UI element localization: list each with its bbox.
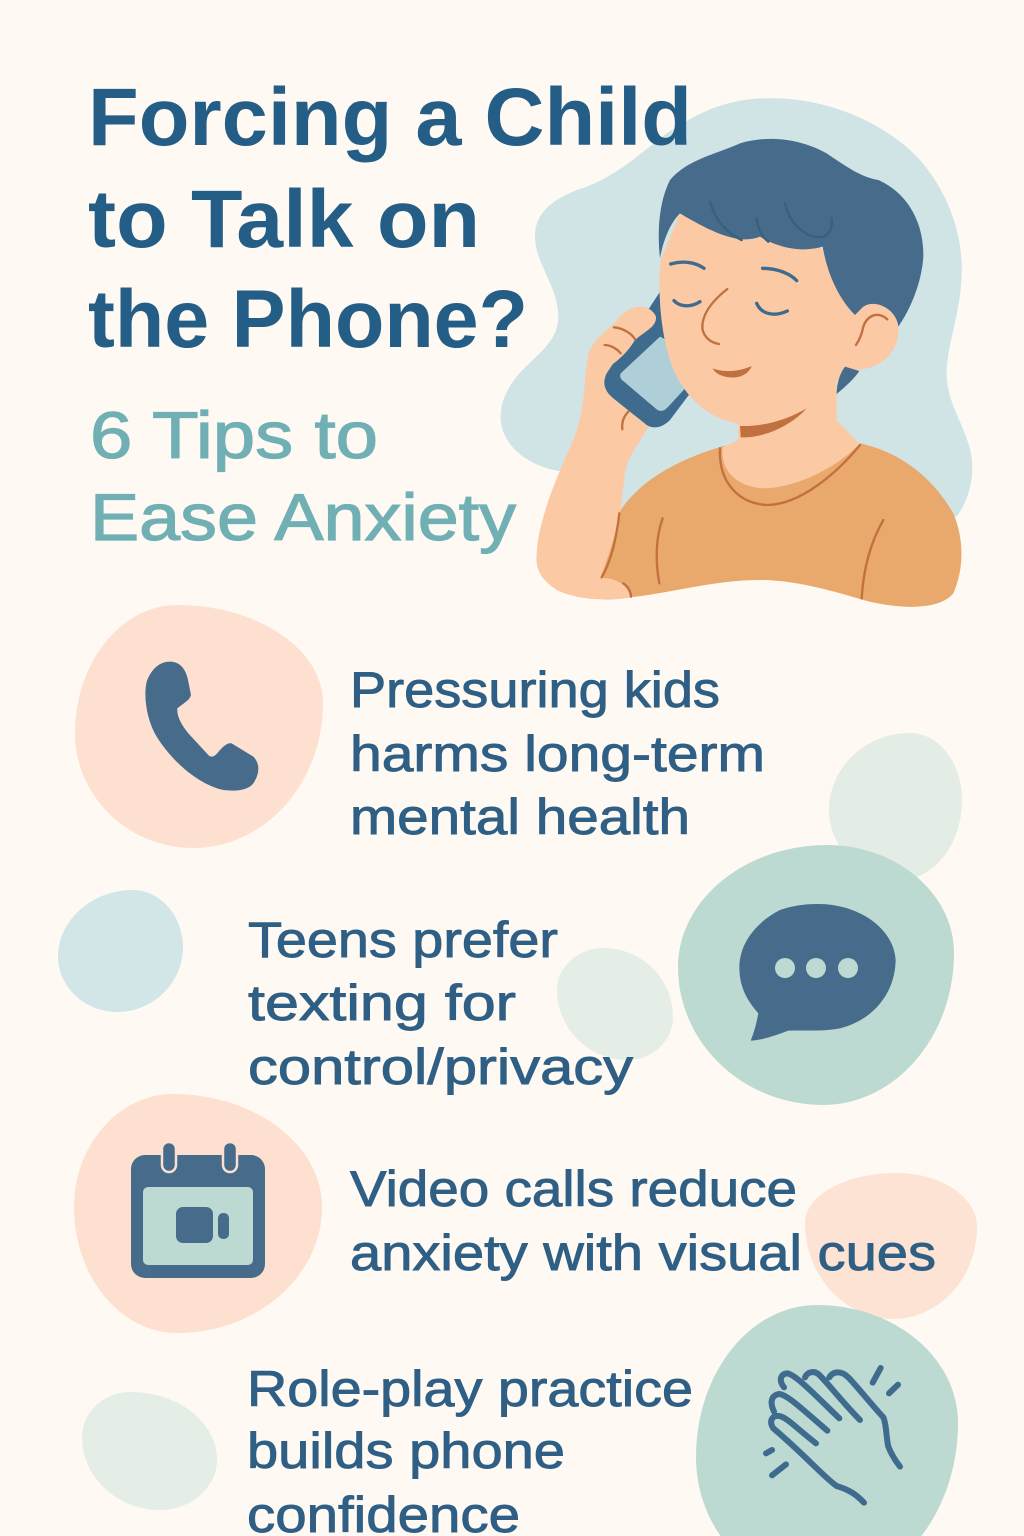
tip 1	[75, 605, 765, 848]
phone screen	[620, 337, 687, 411]
teal blob	[696, 1305, 958, 1536]
tip text	[350, 1161, 936, 1281]
subtitle	[90, 398, 516, 554]
fingers	[587, 307, 656, 365]
illustration: child on the phone	[501, 98, 972, 607]
tip text: texting for	[248, 975, 516, 1031]
decorative blob: center	[557, 948, 673, 1060]
chat dots	[775, 958, 858, 978]
title: Forcing a Child	[88, 72, 692, 163]
tip 3	[74, 1094, 936, 1333]
face	[660, 213, 860, 425]
tip 2	[248, 845, 954, 1105]
teal blob	[678, 845, 954, 1105]
peach blob	[74, 1094, 322, 1333]
subtitle: Ease Anxiety	[90, 480, 516, 554]
tip text: builds phone	[247, 1423, 565, 1479]
decorative blob: left light blue	[58, 890, 183, 1012]
decorative blob: upper right	[829, 733, 962, 880]
eyebrows and eyes	[671, 262, 797, 314]
tip text	[350, 662, 765, 845]
tip 4	[247, 1305, 958, 1536]
hair strands	[710, 202, 832, 242]
title	[88, 72, 692, 365]
phone	[604, 287, 690, 427]
title: to Talk on	[88, 174, 480, 265]
tip text: mental health	[350, 789, 690, 845]
tip text: Teens prefer	[248, 912, 558, 968]
tip text: anxiety with visual cues	[350, 1225, 936, 1281]
arm and hand	[536, 307, 673, 600]
shirt	[600, 443, 961, 607]
nape hair	[837, 367, 859, 394]
tip text	[247, 1361, 693, 1536]
neck and ear	[722, 304, 898, 488]
hair	[659, 139, 923, 327]
tip text: harms long-term	[350, 726, 765, 782]
icon: phone handset	[145, 662, 258, 791]
tip text: Pressuring kids	[350, 662, 720, 718]
icon: clapping hands	[766, 1368, 900, 1503]
icon: calendar with video camera	[131, 1142, 265, 1278]
tip text: Role-play practice	[247, 1361, 693, 1417]
mouth	[713, 366, 752, 378]
peach blob	[75, 605, 323, 848]
decorative blob: bottom left	[82, 1392, 217, 1510]
icon: chat bubble	[739, 904, 896, 1041]
tip text: control/privacy	[248, 1039, 633, 1095]
tip text	[248, 912, 633, 1095]
nose, ear and creases	[602, 289, 887, 598]
subtitle: 6 Tips to	[90, 398, 378, 472]
neck shadow	[740, 408, 807, 437]
background blob	[501, 98, 972, 523]
tip text: Video calls reduce	[350, 1161, 797, 1217]
title: the Phone?	[88, 274, 528, 365]
decorative blob: right peach	[805, 1173, 977, 1319]
